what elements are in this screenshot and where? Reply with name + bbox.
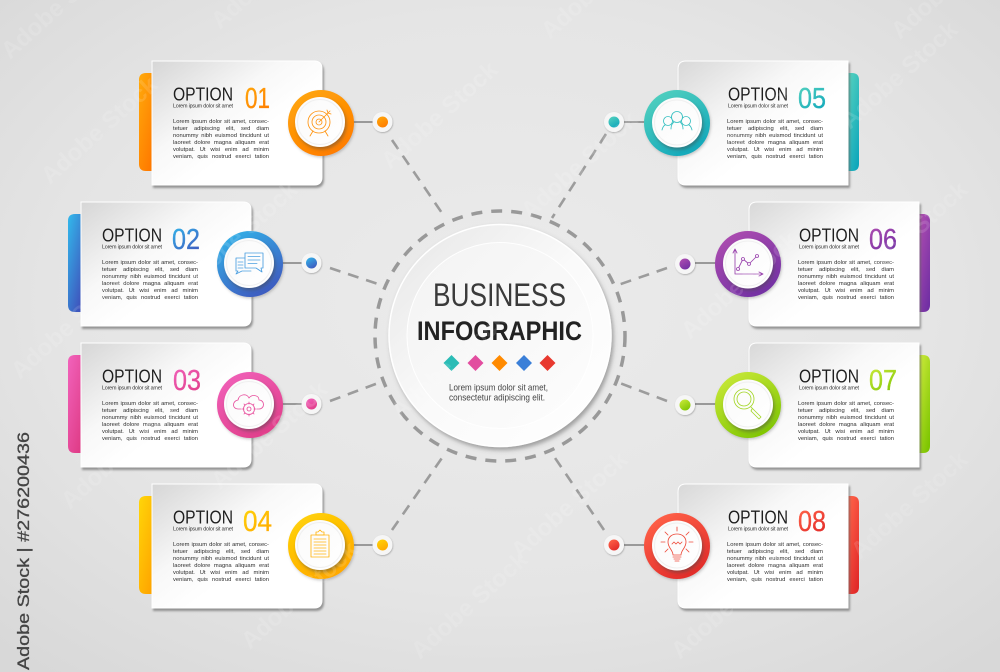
color tab — [68, 214, 81, 312]
color tab — [139, 73, 152, 171]
body text: tetuer adipiscing elit, sed diam — [798, 408, 894, 414]
card — [749, 343, 919, 467]
subtitle: Lorem ipsum dolor sit amet — [102, 386, 162, 392]
heading: OPTION — [728, 508, 788, 528]
body text: laoreet dolore magna aliquam erat — [102, 280, 198, 286]
body text: veniam, quis nostrud exerci tation — [173, 576, 269, 582]
body text: laoreet dolore magna aliquam erat — [798, 422, 894, 428]
number: 04 — [243, 506, 272, 538]
body text: Lorem ipsum dolor sit amet, consec- — [102, 400, 198, 406]
color tab — [68, 355, 81, 453]
subtitle: Lorem ipsum dolor sit amet — [728, 104, 788, 110]
card — [678, 61, 848, 185]
ring — [715, 231, 781, 297]
body text: volutpat. Ut wisi enim ad minim — [102, 428, 198, 434]
body text — [798, 400, 895, 444]
body text: veniam, quis nostrud exerci tation — [102, 436, 198, 442]
body text — [173, 542, 270, 584]
card — [749, 202, 919, 326]
number: 07 — [869, 365, 897, 397]
body text — [798, 260, 895, 302]
inner disc — [295, 97, 345, 147]
node dot — [604, 112, 624, 132]
center caption: consectetur adipiscing elit. — [449, 392, 545, 404]
card — [152, 61, 322, 185]
connector — [282, 262, 303, 264]
inner disc — [295, 520, 345, 570]
body text: nonummy nibh euismod tincidunt ut — [102, 274, 198, 280]
watermark overlay: Adobe Stock — [406, 546, 534, 664]
color tab — [848, 496, 859, 594]
subtitle: Lorem ipsum dolor sit amet — [102, 244, 162, 250]
panel: option 01 — [139, 61, 392, 185]
heading: OPTION — [728, 85, 788, 105]
card — [81, 202, 251, 326]
body text: tetuer adipiscing elit, sed diam — [173, 548, 269, 554]
heading: OPTION — [102, 226, 162, 246]
watermark overlay: Adobe Stock — [836, 16, 964, 134]
dashed spokes connecting center to options — [330, 134, 667, 530]
body text: veniam, quis nostrud exerci tation — [798, 294, 894, 300]
watermark overlay: Adobe Stock — [6, 266, 134, 384]
panel: option 03 — [68, 343, 322, 467]
body text: tetuer adipiscing elit, sed diam — [727, 126, 823, 132]
node dot — [604, 535, 624, 555]
subtitle: Lorem ipsum dolor sit amet — [799, 244, 860, 250]
icon: clipboard — [311, 530, 329, 557]
body text: laoreet dolore magna aliquam erat — [727, 140, 823, 146]
icon: magnifier — [734, 389, 761, 419]
body text: nonummy nibh euismod tincidunt ut — [798, 274, 894, 280]
subtitle: Lorem ipsum dolor sit amet — [799, 386, 860, 392]
body text: tetuer adipiscing elit, sed diam — [727, 548, 823, 554]
number: 03 — [173, 365, 201, 397]
watermark overlay: Adobe Stock — [846, 176, 974, 294]
watermark overlay: Adobe Stock — [36, 71, 164, 189]
body text: veniam, quis nostrud exerci tation — [798, 436, 894, 442]
icon: light bulb — [661, 527, 693, 561]
inner disc — [652, 520, 702, 570]
dashed ring around center — [375, 211, 625, 461]
body text — [102, 260, 199, 302]
body text: volutpat. Ut wisi enim ad minim — [727, 570, 823, 576]
watermark overlay: Adobe Stock — [376, 56, 504, 174]
ring — [288, 513, 354, 579]
body text: veniam, quis nostrud exerci tation — [173, 154, 269, 160]
body text: laoreet dolore magna aliquam erat — [102, 422, 198, 428]
watermark overlay: Adobe Stock — [206, 376, 334, 494]
subtitle: Lorem ipsum dolor sit amet — [728, 526, 788, 532]
watermark overlay: Adobe Stock — [56, 396, 184, 514]
subtitle: Lorem ipsum dolor sit amet — [173, 526, 234, 532]
body text: tetuer adipiscing elit, sed diam — [173, 126, 269, 132]
body text: laoreet dolore magna aliquam erat — [798, 280, 894, 286]
icon: cloud with gear — [234, 395, 264, 416]
heading: OPTION — [102, 367, 162, 387]
watermark overlay: Adobe Stock — [686, 66, 814, 184]
center disc with title — [389, 224, 611, 446]
inner disc — [652, 98, 702, 148]
body text: veniam, quis nostrud exerci tation — [102, 294, 198, 300]
body text: volutpat. Ut wisi enim ad minim — [798, 428, 894, 434]
body text — [173, 118, 270, 162]
icon: people — [662, 112, 692, 130]
body text: Lorem ipsum dolor sit amet, consec- — [798, 400, 894, 406]
connector — [624, 544, 646, 546]
card — [152, 484, 322, 608]
body text: laoreet dolore magna aliquam erat — [173, 562, 269, 568]
body text: tetuer adipiscing elit, sed diam — [102, 408, 198, 414]
icon: line chart — [733, 249, 763, 276]
inner disc — [723, 380, 773, 430]
panel: option 02 — [68, 202, 322, 326]
body text: veniam, quis nostrud exerci tation — [727, 576, 823, 582]
body text: volutpat. Ut wisi enim ad minim — [727, 146, 823, 152]
colored diamonds — [444, 355, 556, 371]
body text: volutpat. Ut wisi enim ad minim — [173, 146, 269, 152]
color tab — [139, 496, 152, 594]
panel: option 06 — [675, 202, 930, 326]
side credit text: Adobe Stock | #276200436 — [14, 432, 33, 670]
watermark overlay: Adobe Stock — [666, 546, 794, 664]
body text: Lorem ipsum dolor sit amet, consec- — [727, 118, 823, 124]
heading: OPTION — [799, 226, 859, 246]
connector — [353, 544, 374, 546]
ring — [644, 90, 710, 156]
ring — [288, 90, 354, 156]
panel: option 05 — [604, 61, 859, 185]
body text: laoreet dolore magna aliquam erat — [727, 562, 823, 568]
number: 05 — [798, 83, 826, 115]
watermark overlay: Adobe Stock — [676, 226, 804, 344]
watermark overlay: Adobe Stock — [506, 446, 634, 564]
heading: OPTION — [173, 85, 233, 105]
node dot — [302, 253, 322, 273]
inner disc — [224, 238, 274, 288]
panel: option 08 — [604, 484, 859, 608]
card — [678, 484, 848, 608]
body text: Lorem ipsum dolor sit amet, consec- — [173, 118, 269, 124]
body text: nonummy nibh euismod tincidunt ut — [102, 414, 198, 420]
connector — [353, 121, 374, 123]
body text: Lorem ipsum dolor sit amet, consec- — [798, 260, 894, 266]
body text: tetuer adipiscing elit, sed diam — [798, 266, 894, 272]
card — [81, 343, 251, 467]
number: 01 — [245, 83, 270, 115]
body text: laoreet dolore magna aliquam erat — [173, 140, 269, 146]
body text: nonummy nibh euismod tincidunt ut — [727, 132, 823, 138]
body text: volutpat. Ut wisi enim ad minim — [102, 288, 198, 294]
ring — [217, 231, 283, 297]
color tab — [919, 214, 930, 312]
inner disc — [723, 238, 773, 288]
subtitle: Lorem ipsum dolor sit amet — [173, 104, 234, 110]
body text: nonummy nibh euismod tincidunt ut — [798, 414, 894, 420]
body text: Lorem ipsum dolor sit amet, consec- — [173, 542, 269, 548]
body text — [727, 542, 824, 584]
body text: Lorem ipsum dolor sit amet, consec- — [727, 542, 823, 548]
node dot — [675, 395, 695, 415]
ring — [644, 513, 710, 579]
connector — [695, 262, 717, 264]
watermark overlay: Adobe Stock — [846, 446, 974, 564]
number: 08 — [798, 506, 826, 538]
color tab — [919, 355, 930, 453]
center caption — [449, 382, 548, 404]
watermark overlay: Adobe Stock — [236, 536, 364, 654]
number: 06 — [869, 224, 897, 256]
color tab — [848, 73, 859, 171]
body text — [727, 118, 824, 162]
body text — [102, 400, 199, 444]
connector — [282, 403, 303, 405]
panel: option 04 — [139, 484, 392, 608]
body text: volutpat. Ut wisi enim ad minim — [173, 570, 269, 576]
title: infographic: INFOGRAPHIC — [417, 316, 582, 346]
body text: veniam, quis nostrud exerci tation — [727, 154, 823, 160]
node dot — [372, 112, 392, 132]
icon: target — [308, 110, 331, 136]
icon: chat bubbles — [236, 253, 263, 274]
connector — [624, 121, 646, 123]
body text: nonummy nibh euismod tincidunt ut — [173, 132, 269, 138]
watermark overlay: Adobe Stock — [516, 106, 644, 224]
heading: OPTION — [799, 367, 859, 387]
node dot — [302, 394, 322, 414]
node dot — [675, 254, 695, 274]
watermark overlay: Adobe Stock — [386, 306, 514, 424]
ring — [217, 372, 283, 438]
inner disc — [224, 379, 274, 429]
watermark overlay: Adobe Stock — [176, 176, 304, 294]
heading: OPTION — [173, 508, 233, 528]
panel: option 07 — [675, 343, 930, 467]
ring — [715, 372, 781, 438]
body text: Lorem ipsum dolor sit amet, consec- — [102, 260, 198, 266]
body text: tetuer adipiscing elit, sed diam — [102, 266, 198, 272]
body text: volutpat. Ut wisi enim ad minim — [798, 288, 894, 294]
title: business: BUSINESS — [433, 277, 566, 313]
body text: nonummy nibh euismod tincidunt ut — [727, 556, 823, 562]
center caption: Lorem ipsum dolor sit amet, — [449, 382, 548, 394]
node dot — [372, 535, 392, 555]
number: 02 — [172, 224, 200, 256]
connector — [695, 403, 717, 405]
body text: nonummy nibh euismod tincidunt ut — [173, 556, 269, 562]
